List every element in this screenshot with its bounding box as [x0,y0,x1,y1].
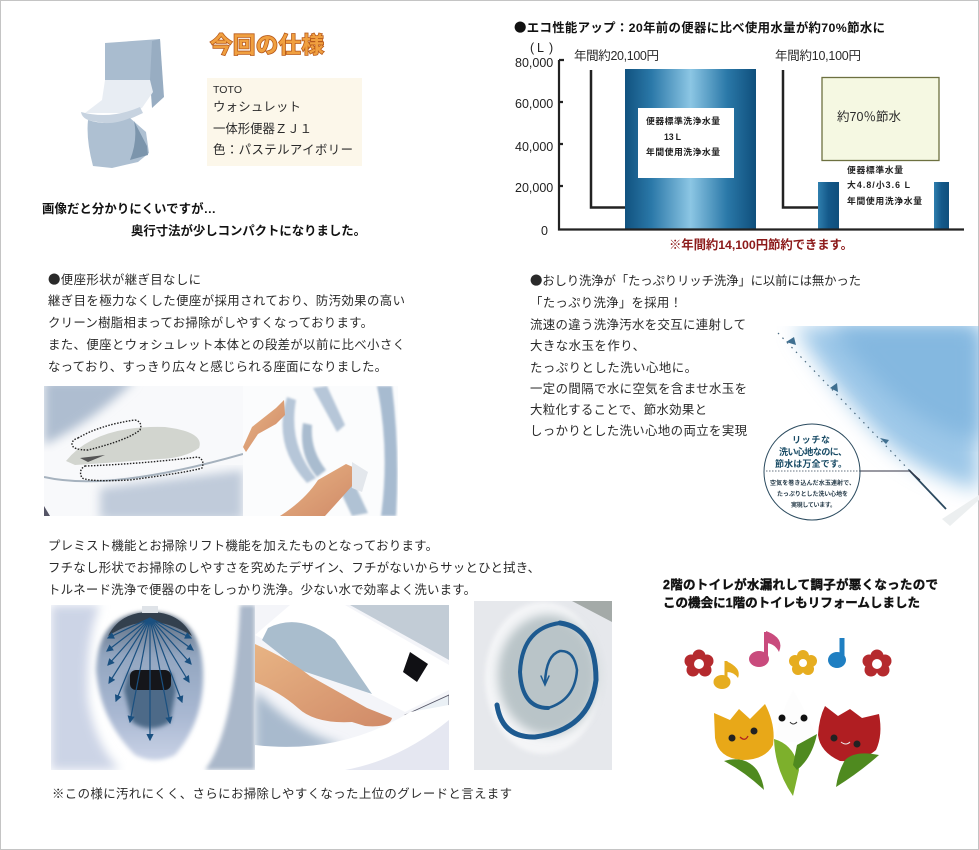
red tulip [818,706,880,787]
70 percent saved box: 約70％節水 [837,109,901,124]
yellow tulip [714,704,774,790]
compact note: 画像だと分かりにくいですが… [42,201,216,216]
text: washing feature: 大きな水玉を作り、 [530,339,645,353]
text: washing feature: たっぷりとした洗い心地に。 [530,361,697,375]
callout circle [764,424,920,520]
callout photo: water jet [764,326,979,526]
old toilet bar [574,48,756,230]
old toilet bar: 13 L [664,132,682,142]
text: washing feature: 「たっぷり洗浄」を採用！ [530,296,682,310]
reform message: この機会に1階のトイレもリフォームしました [663,595,920,610]
text: cleaning features: トルネード洗浄で便器の中をしっかり洗浄。少ない水で効率よく洗います。 [48,582,476,597]
spec panel: 一体形便器ＺＪ１ [213,122,312,136]
compact note [42,201,366,238]
70 percent saved box [822,78,939,160]
red flower right [862,650,892,676]
yellow flower [789,650,817,675]
text: cleaning features [48,538,540,597]
text: washing feature: 一定の間隔で水に空気を含ませ水玉を [530,381,747,396]
illustration: flowers, notes and tulips [684,631,892,796]
text: seat shape: 継ぎ目を極力なくした便座が採用されており、防汚効果の高い [48,293,405,308]
old toilet bar: 年間約20,100円 [574,48,659,63]
new toilet bars: 年間使用洗浄水量 [847,195,922,206]
text: washing feature: ●おしり洗浄が「たっぷりリッチ洗浄」に以前には無かった [530,271,861,289]
new toilet bars: 大4.8/小3.6 L [847,179,911,190]
spiral arrow [497,623,596,737]
photo: tornado wash spiral [474,601,612,770]
y axis labels [515,41,553,238]
callout circle: たっぷりとした洗い心地を [777,490,848,498]
white tulip face and leaves [774,690,817,796]
photo: lift function with hand [255,605,449,770]
text: seat shape [48,270,405,374]
text: washing feature: 流速の違う洗浄汚水を交互に連射して [530,317,746,332]
new toilet bars: 便器標準水量 [847,164,903,175]
photo: seamless seat [44,380,243,520]
y axis labels: ) [549,41,553,55]
dotted seam outlines [72,420,203,481]
text: cleaning features: プレミスト機能とお掃除リフト機能を加えたものとなっております。 [48,538,438,553]
callout circle: 実現しています。 [791,501,836,509]
closing note: ※この様に汚れにくく、さらにお掃除しやすくなった上位のグレードと言えます [52,786,512,801]
photo: premist bowl with spray arrows [51,605,255,770]
spec panel: ウォシュレット [213,100,301,114]
spec panel: 色：パステルアイボリー [213,143,353,157]
compact note: 奥行寸法が少しコンパクトになりました。 [131,223,366,238]
title: 今回の仕様 [210,33,324,58]
spray arrows [107,618,193,740]
callout circle: 洗い心地なのに、 [779,446,847,457]
new toilet bars: 年間約10,100円 [775,48,861,63]
text: seat shape: クリーン樹脂相まってお掃除がしやすくなっております。 [48,315,373,330]
text: washing feature: 大粒化することで、節水効果と [530,402,707,417]
text: washing feature: しっかりとした洗い心地の両立を実現 [530,423,748,438]
callout circle: 節水は万全です。 [775,458,847,469]
y axis labels: 80,000 [515,56,553,70]
y axis labels: ( [530,41,535,55]
text: seat shape: なっており、すっきり広々と感じられる座面になりました。 [48,359,387,374]
yellow note [714,661,739,689]
reform message [663,577,938,610]
text: washing feature [530,271,861,438]
spec panel [207,78,362,166]
y axis labels: 40,000 [515,140,553,154]
text: cleaning features: フチなし形状でお掃除のしやすさを究めたデザイン、フチがないからサッとひと拭き、 [48,560,540,575]
callout circle: 空気を巻き込んだ水玉連射で、 [770,479,855,487]
blue note [828,638,846,668]
y axis labels: 20,000 [515,181,553,195]
callout circle: リッチな [792,435,830,445]
water usage bar chart [515,41,964,238]
text: seat shape: ●便座形状が継ぎ目なしに [48,270,201,288]
y axis labels: L [537,41,544,55]
old toilet bar: 年間使用洗浄水量 [646,146,720,157]
y axis labels: 60,000 [515,97,553,111]
saving note: ※年間約14,100円節約できます。 [669,237,853,252]
spec panel: TOTO [213,84,242,96]
reform message: 2階のトイレが水漏れして調子が悪くなったので [663,577,938,592]
product photo: one-piece toilet [81,39,164,168]
old toilet bar: 便器標準洗浄水量 [646,115,720,126]
red flower left [684,650,714,676]
y axis labels: 0 [541,224,548,238]
pink note [749,631,780,667]
photo: wiping the seat [243,386,398,516]
new toilet bars [775,48,949,230]
eco heading: ●エコ性能アップ：20年前の便器に比べ使用水量が約70%節水に [514,18,885,36]
text: seat shape: また、便座とウォシュレット本体との段差が以前に比べ小さく [48,337,405,352]
